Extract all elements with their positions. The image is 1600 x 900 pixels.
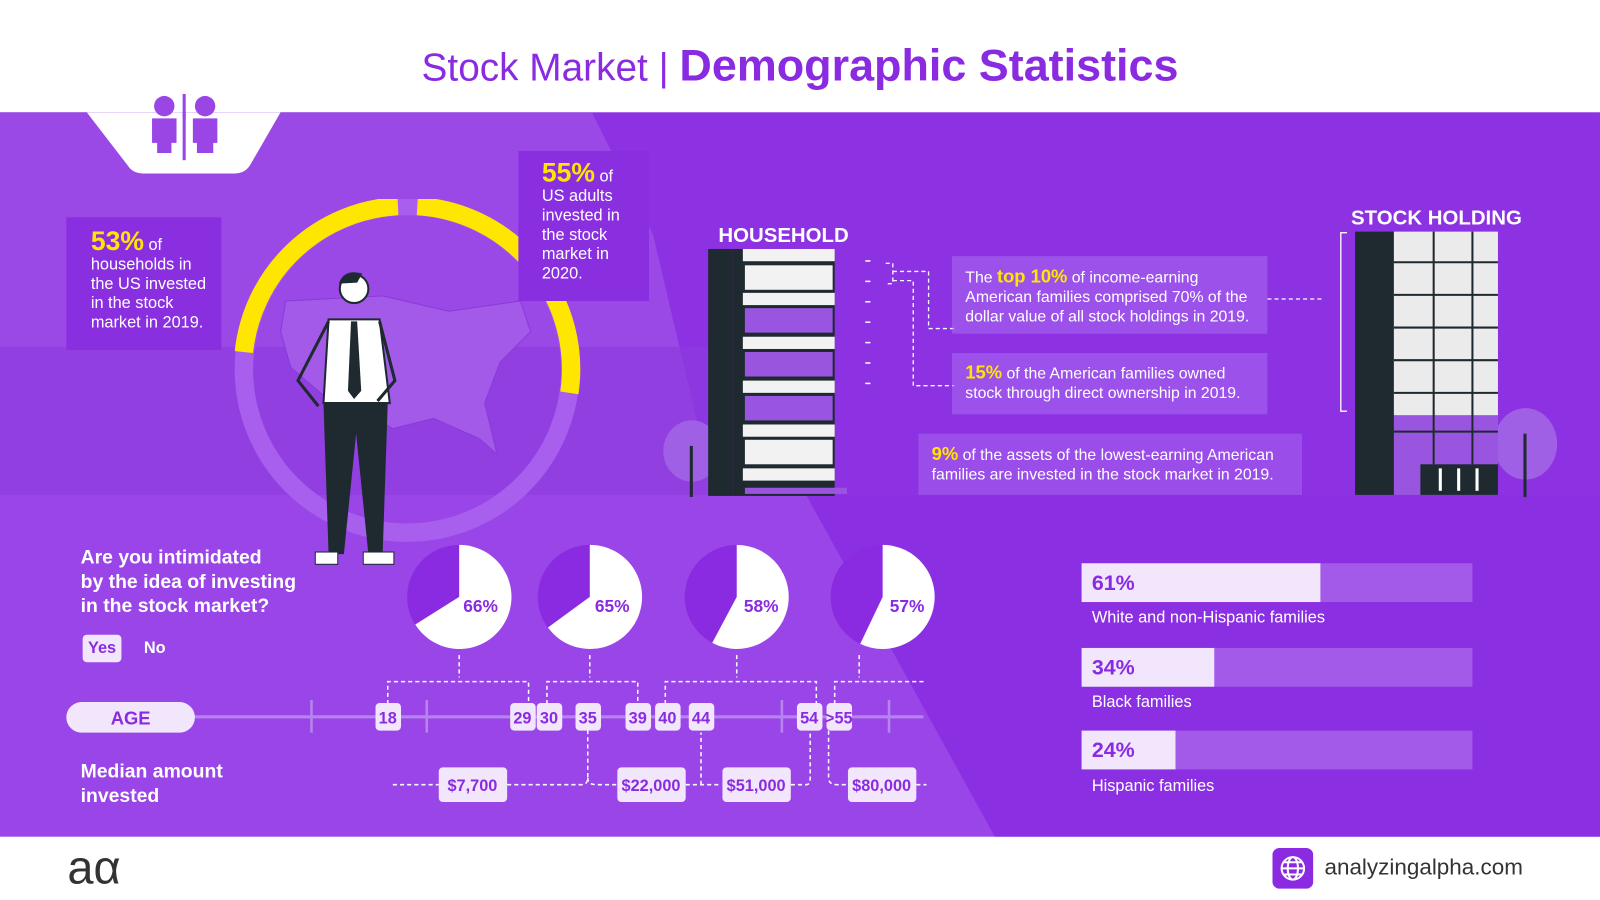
age timeline: 40 — [658, 709, 676, 727]
callout: 9%: families are invested in the stock market in 2019. — [932, 466, 1274, 484]
callout: 53% households: market in 2019. — [91, 314, 203, 332]
question text: by the idea of investing — [81, 571, 296, 593]
age timeline: 54 — [800, 709, 818, 727]
household building — [664, 224, 849, 497]
age timeline: $80,000 — [852, 777, 911, 795]
pie charts: 65% — [595, 596, 630, 616]
stock holding building — [1340, 207, 1558, 497]
bar chart: ethnicity: 24% — [1092, 739, 1135, 762]
median label — [81, 761, 223, 807]
pie charts: 66% — [463, 596, 498, 616]
callout: 53% households: 53% of — [91, 226, 162, 256]
bar chart: ethnicity: 34% — [1092, 656, 1135, 680]
footer logo: aα — [67, 841, 121, 894]
question text: in the stock market? — [81, 596, 269, 617]
dashed connectors household — [865, 260, 1322, 386]
median label: Median amount — [81, 761, 223, 783]
callout: top 10% — [952, 256, 1267, 334]
legend yes/no: No — [144, 640, 166, 657]
age timeline: 18 — [379, 709, 397, 727]
callout: top 10%: dollar value of all stock holdings in 2019. — [965, 308, 1249, 326]
man — [340, 274, 368, 303]
bar chart: ethnicity: 61% — [1092, 571, 1135, 595]
map — [281, 296, 531, 454]
callout: 55% adults: the stock — [542, 227, 607, 244]
callout: 55% adults: invested in — [542, 207, 620, 224]
callout: 53% households — [66, 217, 221, 350]
age timeline: 44 — [692, 709, 710, 727]
median label: invested — [81, 786, 159, 807]
callout: 15% — [952, 353, 1267, 414]
age timeline — [66, 655, 926, 802]
callout: 55% adults: US adults — [542, 188, 613, 205]
age timeline: 29 — [513, 709, 532, 727]
title: Stock Market | Demographic Statistics — [422, 41, 1178, 91]
callout: 9% — [918, 434, 1302, 495]
people heads — [154, 94, 216, 118]
legend yes/no: Yes — [88, 640, 116, 657]
callout: 55% adults: 55% of — [542, 157, 613, 188]
ring chart with map and man — [234, 199, 580, 565]
callout: 55% adults: market in — [542, 246, 609, 263]
stock holding building: STOCK HOLDING — [1351, 207, 1522, 230]
callout: 15%: 15% of the American families owned — [965, 362, 1225, 383]
callout: 53% households: the US invested — [91, 276, 206, 293]
callout: top 10%: American families comprised 70% of the — [965, 289, 1247, 306]
age timeline: $7,700 — [447, 777, 497, 795]
age timeline: $22,000 — [622, 777, 680, 795]
question text — [81, 547, 296, 617]
bar chart: ethnicity: Hispanic families — [1092, 778, 1214, 795]
tab icon: people — [87, 112, 280, 174]
callout: 9%: 9% of the assets of the lowest-earning American — [932, 444, 1274, 464]
question text: Are you intimidated — [81, 547, 262, 568]
age timeline: 30 — [540, 709, 558, 727]
age timeline: >55 — [825, 709, 853, 727]
callout: top 10%: The top 10% of income-earning — [965, 266, 1198, 287]
callout: 55% adults — [518, 151, 649, 301]
household building: HOUSEHOLD — [718, 224, 849, 247]
callout: 55% adults: 2020. — [542, 265, 583, 283]
footer website — [1272, 848, 1523, 889]
bar chart: ethnicity: Black families — [1092, 694, 1192, 711]
callout: 53% households: households in — [91, 256, 192, 273]
callout: 15%: stock through direct ownership in 2019. — [965, 385, 1240, 402]
age timeline: 39 — [629, 709, 647, 727]
age timeline: 35 — [579, 709, 597, 727]
footer website: analyzingalpha.com — [1324, 854, 1523, 880]
pie charts: 58% — [744, 596, 779, 616]
bar chart: ethnicity: White and non-Hispanic families — [1092, 609, 1325, 627]
age timeline: $51,000 — [727, 777, 786, 795]
bar chart: ethnicity — [1082, 563, 1472, 795]
legend yes/no — [82, 634, 166, 662]
pie charts — [407, 544, 935, 649]
pie charts: 57% — [890, 596, 924, 616]
age timeline: AGE — [111, 707, 151, 728]
callout: 53% households: in the stock — [91, 295, 173, 312]
